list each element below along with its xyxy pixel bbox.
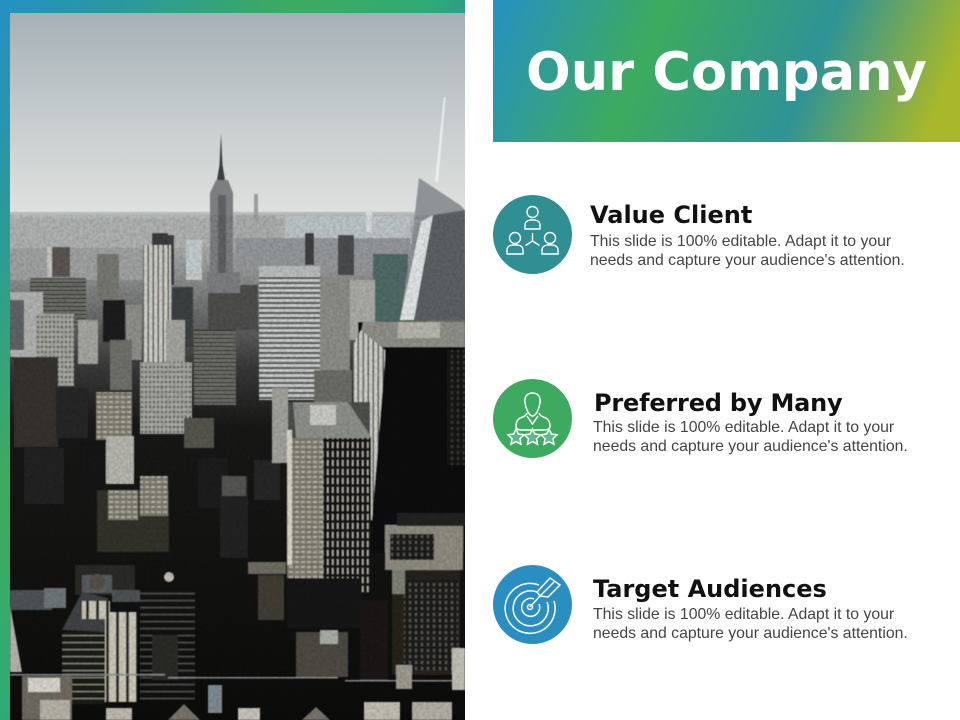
perforated facade building — [287, 402, 372, 628]
description — [593, 419, 908, 455]
dark tower right — [353, 322, 465, 552]
title banner: Our Company — [526, 42, 927, 103]
observation deck foreground — [10, 648, 465, 720]
lower-right buildings — [248, 513, 465, 680]
white grid tower — [259, 266, 320, 400]
heading: Target Audiences — [593, 575, 827, 603]
description — [593, 606, 908, 642]
photo: city skyline — [10, 13, 465, 720]
icon: person with three stars — [493, 379, 572, 458]
description: This slide is 100% editable. Adapt it to your — [593, 606, 894, 623]
distant haze skyline — [10, 194, 465, 280]
description: This slide is 100% editable. Adapt it to your — [593, 419, 894, 436]
item: Value Client — [493, 195, 905, 274]
icon: target with arrow — [493, 565, 572, 644]
description: This slide is 100% editable. Adapt it to your — [590, 233, 891, 250]
description: needs and capture your audience's attention. — [593, 625, 908, 642]
description — [590, 233, 905, 269]
right glass tower and antenna — [400, 97, 465, 320]
gradient frame behind photo — [0, 0, 465, 720]
description: needs and capture your audience's attention. — [590, 252, 905, 269]
mid-ground buildings — [10, 233, 465, 405]
heading: Value Client — [590, 201, 752, 229]
tall striped tower — [143, 245, 171, 363]
lower-left rooftops — [10, 565, 195, 704]
lower-left blocks — [14, 357, 352, 558]
heading: Preferred by Many — [594, 389, 842, 417]
item: Preferred by Many — [493, 379, 908, 458]
photo grain — [10, 215, 465, 720]
description: needs and capture your audience's attention. — [593, 438, 908, 455]
item: Target Audiences — [493, 565, 908, 644]
icon: people network — [493, 195, 572, 274]
Empire State Building — [207, 133, 240, 293]
title banner — [493, 0, 960, 142]
